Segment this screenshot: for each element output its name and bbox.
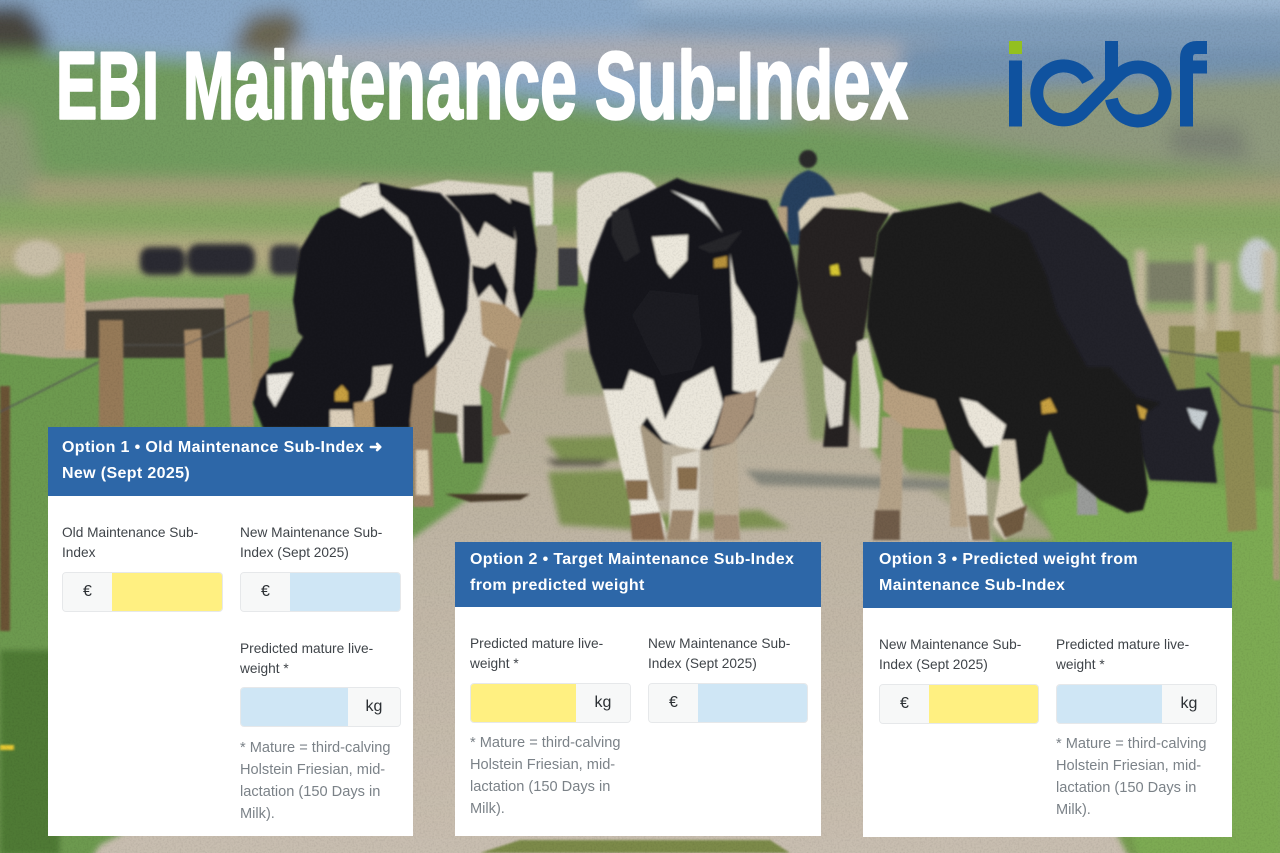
label: predicted live-weight: Predicted mature live- [240, 641, 373, 656]
title: EBI [56, 32, 159, 140]
heading: option 1 [48, 427, 413, 496]
label: predicted live-weight: weight * [240, 661, 289, 676]
label: old maintenance sub-index [62, 525, 198, 560]
heading: option 2: Option 2 • Target Maintenance Sub-Index [470, 551, 794, 568]
heading: option 1: New (Sept 2025) [62, 465, 190, 482]
foreground detail [0, 494, 790, 853]
label: new maintenance sub-index [648, 636, 790, 671]
label: new maintenance sub-index: Index (Sept 2025) [879, 657, 988, 672]
footnote: Milk). [470, 801, 505, 817]
panel: option 3 [863, 542, 1232, 837]
label: new maintenance sub-index [879, 637, 1021, 672]
heading: option 3: Option 3 • Predicted weight from [879, 551, 1138, 568]
gravel track [90, 320, 1130, 853]
footnote: lactation (150 Days in [1056, 780, 1196, 796]
grass verges [0, 312, 1280, 853]
label: predicted live-weight: weight * [1056, 657, 1105, 672]
footnote: Milk). [240, 806, 275, 822]
cow: centre walking towards camera [584, 178, 799, 540]
cow: back right of centre [797, 192, 903, 448]
white cow in the distance [533, 172, 658, 290]
heading: option 3 [863, 542, 1232, 608]
label: old maintenance sub-index: Index [62, 545, 95, 560]
cow: behind left [410, 180, 537, 463]
label: predicted live-weight: Predicted mature live- [470, 636, 603, 651]
output: predicted weight in kg: kg [366, 698, 382, 715]
footnote [470, 735, 620, 817]
output: predicted weight in kg: kg [1181, 695, 1197, 712]
input: weight in kg: kg [595, 694, 611, 711]
output: new value in euro [648, 683, 808, 723]
label: predicted live-weight: weight * [470, 656, 519, 671]
footnote: lactation (150 Days in [240, 784, 380, 800]
heading: option 2 [455, 542, 821, 607]
bright grass bank at right [1040, 480, 1280, 853]
input: value in euro: € [900, 695, 909, 712]
cow: left grazing [253, 183, 470, 507]
output: new value in euro [240, 572, 401, 612]
cow: right grazing [867, 202, 1160, 540]
distant cows on the field [14, 238, 1275, 302]
footnote: lactation (150 Days in [470, 779, 610, 795]
footnote: Holstein Friesian, mid- [240, 762, 385, 778]
far fence posts [1135, 245, 1276, 355]
label: new maintenance sub-index: New Maintenance Sub- [879, 637, 1021, 652]
footnote: Holstein Friesian, mid- [470, 757, 615, 773]
output: predicted weight in kg [1056, 684, 1217, 724]
footnote: Holstein Friesian, mid- [1056, 758, 1201, 774]
fence posts and wire [0, 253, 1280, 631]
person walking behind the herd [777, 150, 838, 245]
label: new maintenance sub-index [240, 525, 382, 560]
title [56, 30, 908, 140]
footnote: * Mature = third-calving [240, 740, 390, 756]
logo: icbf [1009, 41, 1207, 128]
output: predicted weight in kg [240, 687, 401, 727]
panel: option 2 [455, 542, 821, 836]
input: old value in euro: € [83, 583, 92, 600]
label: new maintenance sub-index: Index (Sept 2025) [648, 656, 757, 671]
output: new value in euro: € [669, 694, 678, 711]
heading: option 3: Maintenance Sub-Index [879, 577, 1065, 594]
footnote [240, 740, 390, 822]
input: value in euro [879, 684, 1039, 724]
label: new maintenance sub-index: New Maintenance Sub- [240, 525, 382, 540]
footnote: * Mature = third-calving [1056, 736, 1206, 752]
heading: option 2: from predicted weight [470, 577, 645, 594]
grassy strips on the track [545, 340, 1060, 540]
footnote: * Mature = third-calving [470, 735, 620, 751]
panel: option 1 [48, 427, 413, 836]
label: predicted live-weight [470, 636, 603, 671]
input: old value in euro [62, 572, 223, 612]
input: weight in kg [470, 683, 631, 723]
cow: behind right [990, 192, 1220, 515]
heading: option 1: Option 1 • Old Maintenance Sub-Index ➜ [62, 439, 383, 456]
label: new maintenance sub-index: New Maintenance Sub- [648, 636, 790, 651]
label: new maintenance sub-index: Index (Sept 2025) [240, 545, 349, 560]
label: predicted live-weight: Predicted mature live- [1056, 637, 1189, 652]
output: new value in euro: € [261, 583, 270, 600]
distant sky, hills and fields [0, 0, 1280, 320]
trough [0, 297, 225, 358]
label: predicted live-weight [240, 641, 373, 676]
label: old maintenance sub-index: Old Maintenance Sub- [62, 525, 198, 540]
footnote: Milk). [1056, 802, 1091, 818]
label: predicted live-weight [1056, 637, 1189, 672]
footnote [1056, 736, 1206, 818]
